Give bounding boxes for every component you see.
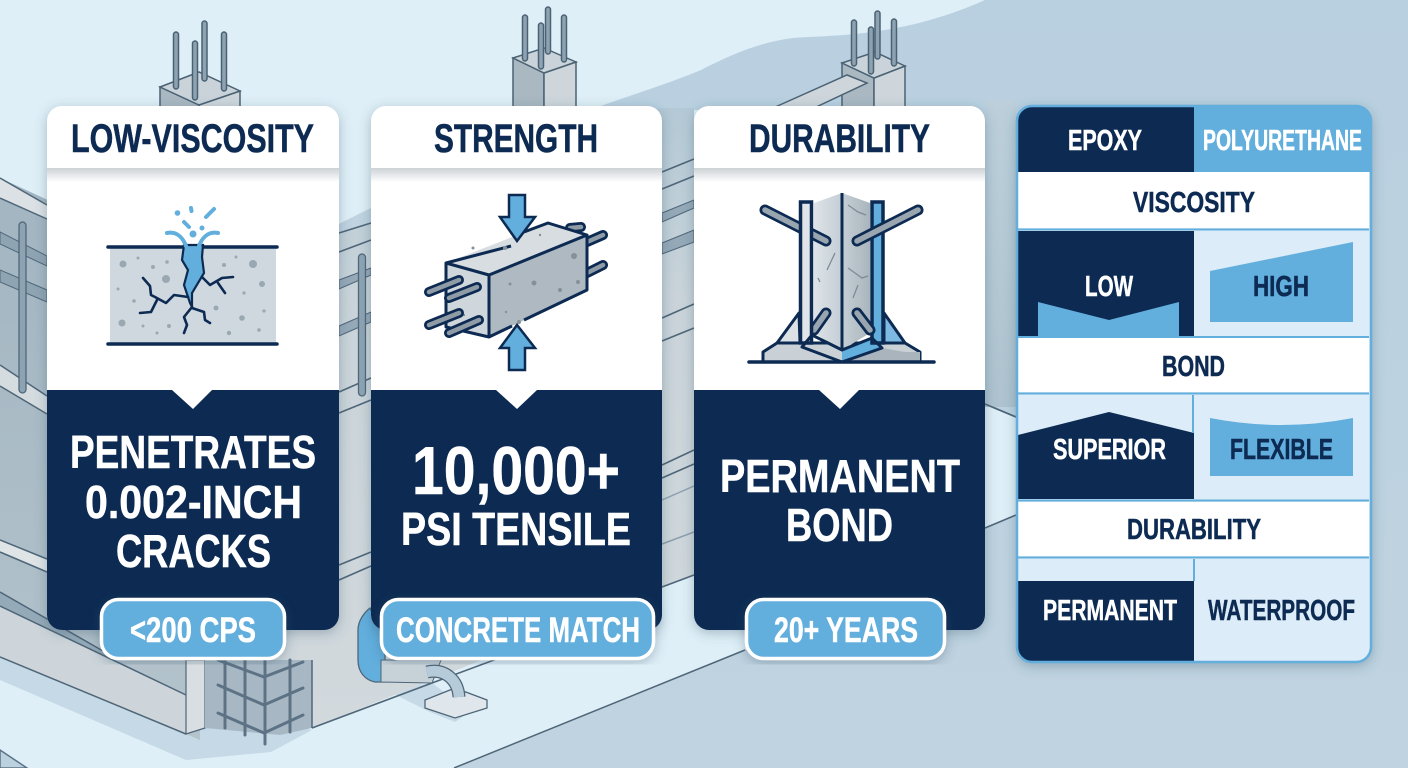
cell: epoxy permanent: PERMANENT <box>1043 595 1177 627</box>
row label: bond: BOND <box>1162 351 1225 383</box>
heading: STRENGTH <box>434 117 598 161</box>
table header: epoxy <box>1016 105 1194 172</box>
cell: polyurethane waterproof: WATERPROOF <box>1208 595 1355 627</box>
panel: low-viscosity <box>47 106 339 630</box>
panel: durability <box>694 106 985 630</box>
ground shadow <box>0 650 312 760</box>
cell: epoxy superior bond: SUPERIOR <box>1053 434 1166 466</box>
cell: polyurethane high viscosity: HIGH <box>1253 271 1309 303</box>
column 3 <box>773 11 905 125</box>
cell: epoxy low viscosity <box>1018 231 1194 336</box>
cell: polyurethane high viscosity <box>1210 242 1353 322</box>
badge: under 200 cps: <200 CPS <box>130 611 256 650</box>
cell: epoxy superior bond <box>1018 412 1194 499</box>
icon: loaded concrete beam <box>429 195 603 370</box>
icon: anchored column <box>749 193 934 362</box>
row label: durability: DURABILITY <box>1127 514 1261 546</box>
value text: PERMANENT <box>720 450 960 502</box>
panel: strength: PSI TENSILE <box>401 503 631 555</box>
cell: polyurethane flexible bond <box>1210 418 1353 476</box>
badge: under 200 cps <box>102 600 284 658</box>
column 2 <box>513 7 576 125</box>
value text: 10,000+ <box>412 433 620 509</box>
panel: durability: BOND <box>786 499 893 551</box>
badge: 20+ years: 20+ YEARS <box>774 611 918 650</box>
panel: comparison table <box>1016 105 1372 663</box>
drain pipe <box>358 608 385 682</box>
row label: viscosity: VISCOSITY <box>1133 187 1255 219</box>
row label: viscosity <box>1018 172 1369 228</box>
row label: durability <box>1018 502 1369 556</box>
panel: strength <box>371 106 662 630</box>
panel: low-viscosity: 0.002-INCH <box>85 476 302 528</box>
heading: DURABILITY <box>749 117 930 161</box>
row label: bond <box>1018 338 1369 392</box>
table header: polyurethane <box>1194 105 1372 172</box>
corner column and rebar cage <box>186 660 205 734</box>
badge: concrete match: CONCRETE MATCH <box>396 611 640 650</box>
panel: low-viscosity: CRACKS <box>116 525 271 577</box>
cell: epoxy permanent <box>1016 581 1194 663</box>
right wall <box>186 108 694 728</box>
badge: 20+ years <box>746 600 944 658</box>
heading: LOW-VISCOSITY <box>71 117 314 161</box>
cell: epoxy low viscosity: LOW <box>1085 271 1133 303</box>
left wall <box>0 178 200 740</box>
value text: PENETRATES <box>70 426 316 478</box>
table header: epoxy: EPOXY <box>1068 125 1142 157</box>
reinforced columns at top <box>160 7 905 125</box>
icon: cracked concrete with resin <box>108 208 277 344</box>
badge: concrete match <box>382 600 654 658</box>
column 1 <box>160 21 240 125</box>
cell: polyurethane flexible bond: FLEXIBLE <box>1230 434 1333 466</box>
